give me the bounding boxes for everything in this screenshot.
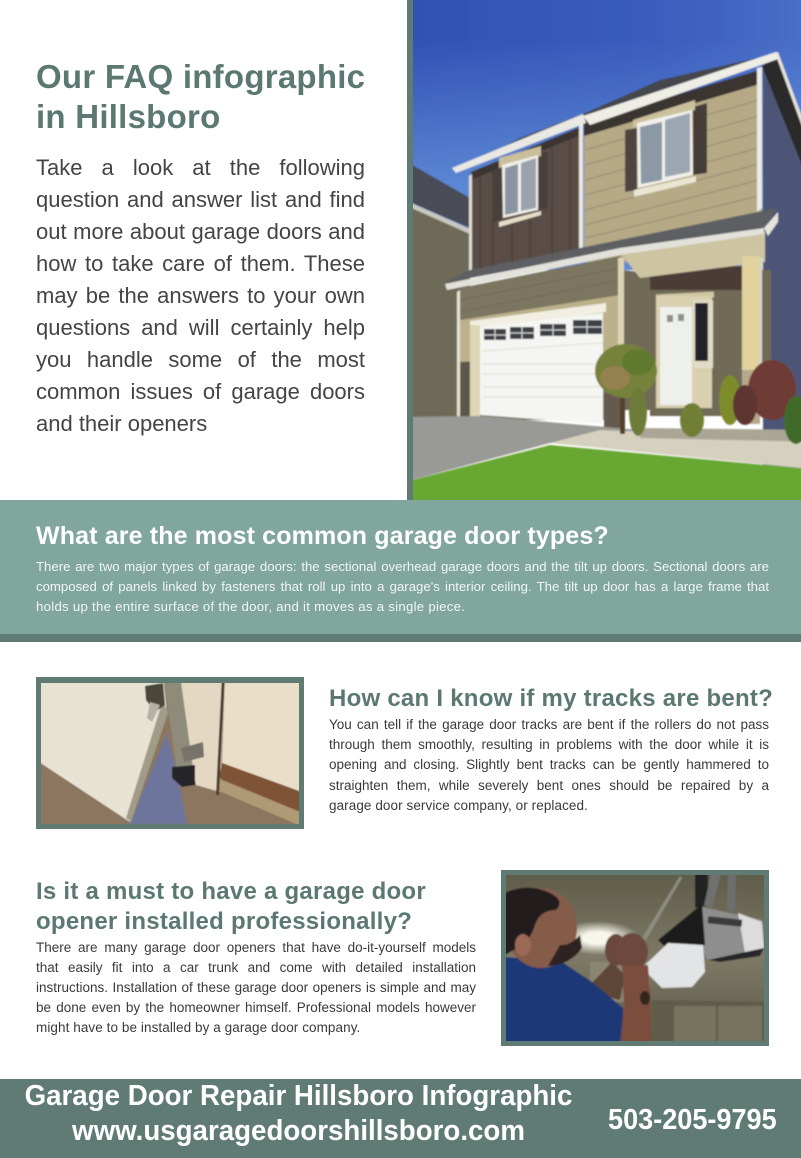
intro text block: questions and will certainly help	[36, 315, 365, 340]
lower wall	[460, 256, 620, 420]
intro text block: Take a look at the following	[36, 155, 365, 180]
body text	[36, 559, 769, 614]
heading: opener installed professionally?	[36, 908, 412, 935]
photo: bent garage door track	[36, 677, 304, 829]
gravel	[550, 430, 801, 470]
body text	[329, 717, 769, 813]
body text: through them smoothly, resulting in problems with the door while it is	[329, 737, 769, 752]
body text	[36, 940, 476, 1035]
intro text block: and their openers	[36, 411, 207, 436]
heading: What are the most common garage door types?	[36, 522, 609, 550]
footer	[0, 1079, 801, 1158]
panel: common garage door types	[0, 500, 801, 642]
body text: be done even by the homeowner himself. Professional models however	[36, 1000, 476, 1015]
driveway	[400, 416, 640, 483]
intro text block: how to take care of them. These	[36, 251, 365, 276]
title: in Hillsboro	[36, 98, 220, 135]
intro text block: may be the answers to your own	[36, 283, 365, 308]
body text: straighten them, while severely bent ones should be repaired by a	[329, 778, 769, 793]
heading: How can I know if my tracks are bent?	[329, 685, 773, 712]
footer title and website: Garage Door Repair Hillsboro Infographic	[25, 1080, 572, 1112]
body text: might have to be installed by a garage door company.	[36, 1020, 360, 1035]
panel: left column divider	[407, 0, 413, 500]
grass	[400, 445, 801, 510]
footer title and website: www.usgaragedoorshillsboro.com	[72, 1115, 525, 1147]
photo: house with garage door	[413, 0, 801, 500]
body text: You can tell if the garage door tracks are bent if the rollers do not pass	[329, 717, 769, 732]
body text: holds up the entire surface of the door, and it moves as a single piece.	[36, 599, 465, 614]
intro text block: question and answer list and find	[36, 187, 365, 212]
title	[36, 58, 365, 135]
body text: composed of panels linked by fasteners that roll up into a garage's interior ceiling. The tilt up door has a large frame that	[36, 579, 769, 594]
photo: technician installing opener	[501, 870, 769, 1046]
section: professional opener installation	[36, 878, 476, 1035]
window upper right	[625, 128, 637, 192]
upper roof	[462, 58, 757, 170]
neighbour house	[400, 158, 470, 228]
section: bent tracks	[329, 685, 773, 813]
body text: There are two major types of garage doors: the sectional overhead garage doors and the tilt up doors. Sectional doors are	[36, 559, 769, 574]
title: Our FAQ infographic	[36, 58, 365, 95]
heading: Is it a must to have a garage door	[36, 878, 426, 905]
body text: garage door service company, or replaced.	[329, 798, 588, 813]
body text: instructions. Installation of these garage door openers is simple and may	[36, 980, 476, 995]
intro text block: you handle some of the most	[36, 347, 365, 372]
blue side wall	[763, 60, 801, 510]
porch	[623, 270, 657, 410]
stone	[460, 362, 471, 418]
tan upper wall	[584, 70, 762, 262]
heading	[36, 878, 426, 935]
fascia	[452, 114, 586, 173]
shrubs	[595, 344, 801, 444]
intro text block: out more about garage doors and	[36, 219, 365, 244]
bottom strip	[0, 634, 801, 642]
footer title and website	[25, 1080, 572, 1147]
body text: opening and closing. Slightly bent tracks can be gently hammered to	[329, 757, 769, 772]
phone number: 503-205-9795	[608, 1104, 777, 1136]
body text: There are many garage door openers that have do-it-yourself models	[36, 940, 476, 955]
brown wall	[471, 126, 583, 276]
intro text block: common issues of garage doors	[36, 379, 365, 404]
garage door	[470, 303, 606, 331]
body text: that easily fit into a car trunk and come with detailed installation	[36, 960, 476, 975]
lower roof	[443, 208, 777, 283]
intro text block	[36, 155, 365, 436]
window upper left	[493, 168, 502, 222]
